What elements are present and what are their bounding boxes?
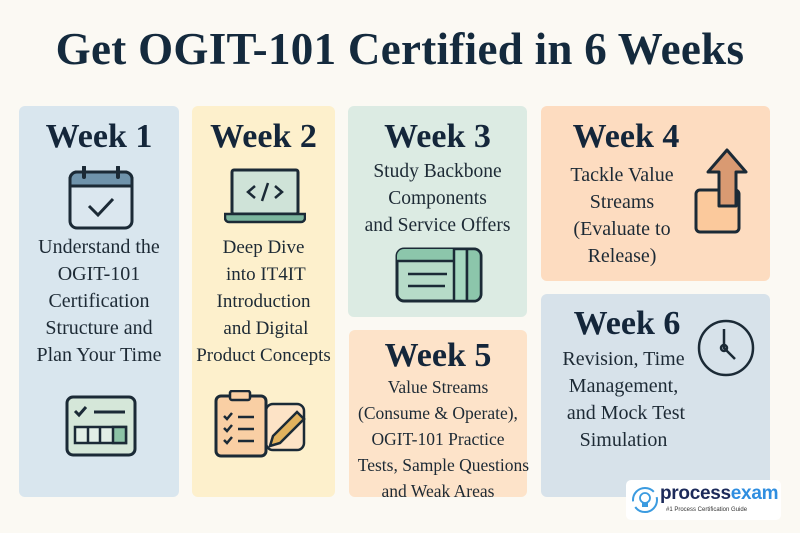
text: week 4: (Evaluate to — [573, 218, 671, 240]
text: week 6 — [562, 348, 685, 451]
text: week 4: Tackle Value — [570, 164, 674, 186]
text: week 1: OGIT-101 — [58, 263, 140, 285]
text: week 2 — [196, 237, 331, 366]
text: week 5: (Consume & Operate), — [358, 403, 518, 423]
icon: service panel — [396, 248, 482, 302]
text: week 5: OGIT-101 Practice — [372, 429, 504, 449]
icon: up arrow — [694, 148, 748, 234]
text: week 2: and Digital — [223, 318, 308, 339]
text: week 5: Tests, Sample Questions — [358, 455, 529, 475]
heading: week 5: Week 5 — [385, 337, 491, 374]
text: week 3: Study Backbone — [373, 161, 502, 182]
text: week 4 — [570, 164, 674, 267]
text: week 3 — [365, 161, 510, 236]
text: week 2: Deep Dive — [223, 237, 304, 258]
icon: progress board — [66, 396, 136, 456]
text: week 3: Components — [388, 188, 487, 209]
icon: checklist and pencil — [214, 390, 306, 458]
title: Get OGIT-101 Certified in 6 Weeks — [56, 24, 744, 74]
text: week 1: Structure and — [45, 317, 153, 339]
text: week 1 — [36, 236, 162, 366]
heading: week 3: Week 3 — [384, 118, 491, 155]
panel: week 6 — [541, 294, 770, 497]
heading: week 6: Week 6 — [574, 305, 680, 342]
text: week 5: Value Streams — [388, 377, 488, 397]
text: week 6: Simulation — [580, 429, 667, 451]
panel: week 4 — [541, 106, 770, 281]
text: week 5 — [358, 377, 529, 501]
logo wordmark: processexam — [660, 483, 778, 504]
text: week 3: and Service Offers — [365, 215, 510, 236]
heading: week 1: Week 1 — [46, 118, 152, 155]
text: week 6: and Mock Test — [567, 402, 685, 424]
text: week 1: Plan Your Time — [36, 344, 162, 366]
text: week 1: Understand the — [38, 236, 160, 258]
icon: calendar — [68, 166, 134, 230]
text: week 2: into IT4IT — [226, 264, 306, 285]
text: week 6: Management, — [569, 375, 678, 397]
text: week 4: Streams — [590, 191, 654, 213]
panel: week 5 — [349, 330, 527, 497]
logo: processexam — [626, 480, 781, 520]
icon: clock — [698, 320, 754, 376]
panel: week 3 — [348, 106, 527, 317]
panel: week 2 — [192, 106, 335, 497]
text: week 5: and Weak Areas — [382, 481, 494, 501]
icon: laptop code — [224, 168, 306, 224]
text: week 1: Certification — [48, 290, 150, 312]
text: week 6: Revision, Time — [562, 348, 685, 370]
panel: week 1 — [19, 106, 179, 497]
text: week 4: Release) — [588, 245, 656, 267]
logo tagline: #1 Process Certification Guide — [666, 507, 747, 513]
text: week 2: Product Concepts — [196, 345, 331, 366]
icon: bulb — [632, 487, 658, 513]
heading: week 4: Week 4 — [573, 118, 679, 155]
heading: week 2: Week 2 — [210, 118, 317, 155]
text: week 2: Introduction — [217, 291, 310, 312]
